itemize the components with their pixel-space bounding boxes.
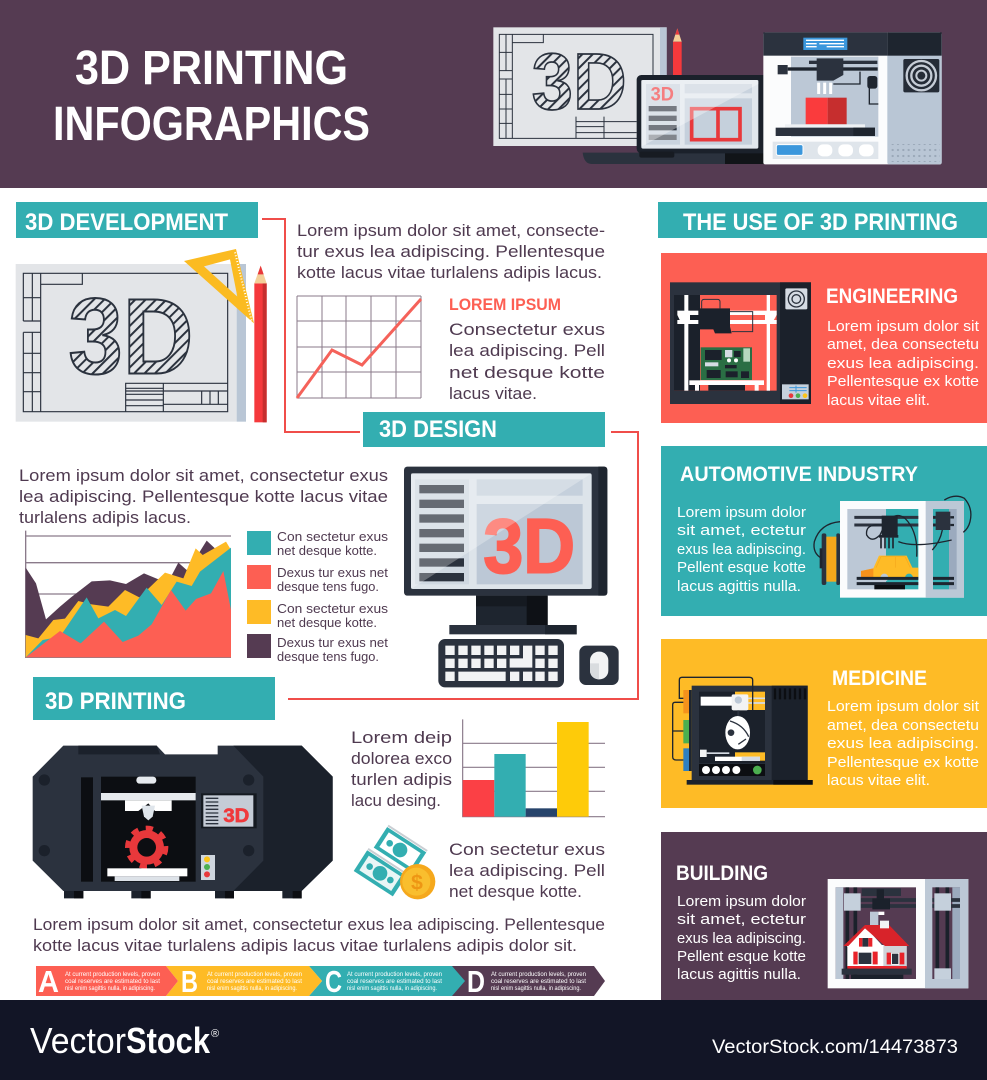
large blueprint illustration [16, 249, 267, 422]
title: INFOGRAPHICS [53, 98, 370, 151]
step B: coal reserves are estimated to last [207, 979, 302, 985]
panel text: Pellentesque ex kotte [827, 755, 979, 771]
text block: development intro: kotte lacus vitae turlalens adipis lacus. [297, 263, 602, 282]
panel title: MEDICINE [832, 667, 927, 690]
panel text: Lorem ipsum dolor sit [827, 699, 979, 715]
icon: large 3D printer [33, 746, 333, 898]
step C: coal reserves are estimated to last [347, 979, 442, 985]
panel title: AUTOMOTIVE INDUSTRY [680, 463, 918, 486]
text block: design intro [19, 466, 388, 527]
heading: 3D printing [33, 677, 275, 720]
text block: chart note: net desque kotte [449, 363, 605, 382]
footer logo: Stock [126, 1020, 211, 1061]
blueprint sheet [493, 27, 667, 146]
panel text: lacus agittis nulla. [677, 967, 801, 983]
icon: house printer [828, 879, 968, 988]
connector: development to design [262, 219, 360, 432]
panel text: Lorem ipsum dolor [677, 894, 806, 910]
text block: bar chart note: turlen adipis [351, 770, 452, 789]
text block: bar chart note: dolorea exco [351, 749, 452, 768]
text block: bar chart note: lacu desing. [351, 791, 441, 810]
panel: engineering [661, 253, 987, 423]
text block: design intro: Lorem ipsum dolor sit amet, consectetur exus [19, 466, 388, 485]
status lights [201, 855, 215, 880]
step A: coal reserves are estimated to last [65, 979, 160, 985]
icon: pencil [254, 266, 267, 422]
pencil [673, 28, 682, 77]
step D: coal reserves are estimated to last [491, 979, 586, 985]
step A [36, 964, 178, 999]
connector: design to printing [288, 432, 638, 699]
panel text: sit amet, ectetur [677, 523, 806, 539]
circuit board [701, 347, 752, 380]
panel text: Pellentesque ex kotte [827, 374, 979, 390]
step arrows A to D [36, 964, 605, 999]
step B [166, 964, 322, 999]
bar chart [463, 719, 605, 817]
skull model [725, 716, 750, 749]
panel text: Pellent esque kotte [677, 560, 806, 576]
legend: Dexus tur exus net [277, 635, 388, 650]
icon: money [354, 825, 435, 899]
step A: A [38, 964, 59, 999]
text block: printing body: Lorem ipsum dolor sit amet, consectetur exus lea adipiscing. Pellentesque [33, 915, 605, 934]
panel text: exus lea adipiscing. [827, 356, 979, 372]
panel text: exus lea adipiscing. [677, 931, 806, 947]
legend [247, 529, 389, 664]
text block: money note: Con sectetur exus [449, 840, 605, 859]
step C: nisl enim sagittis nulla, in adipiscing. [347, 986, 437, 992]
text block: chart note: lacus vitae. [449, 384, 537, 403]
step D: At current production levels, proven [491, 972, 586, 978]
step D [452, 964, 605, 999]
line chart [297, 296, 421, 398]
panel text [677, 894, 806, 983]
blueprint sheet: 3D [532, 37, 627, 126]
footer logo [30, 1020, 219, 1061]
text block: design intro: lea adipiscing. Pellentesque kotte lacus vitae [19, 487, 388, 506]
panel: medicine [661, 639, 987, 808]
panel text: sit amet, ectetur [677, 912, 806, 928]
panel text: Pellent esque kotte [677, 949, 806, 965]
text block: development intro: tur exus lea adipiscing. Pellentesque [297, 242, 605, 261]
heading: the use of 3D printing: THE USE OF 3D PRINTING [683, 209, 958, 236]
icon: large 3D printer: 3D [223, 806, 249, 827]
legend: net desque kotte. [277, 615, 377, 630]
panel text: lacus agittis nulla. [677, 579, 801, 595]
panel title: BUILDING [676, 862, 768, 885]
laptop [583, 75, 768, 164]
text block: bar chart note: Lorem deip [351, 728, 452, 747]
footer band [0, 1000, 987, 1080]
toy car [861, 556, 918, 582]
panel text: lacus vitae elit. [827, 773, 930, 789]
legend: desque tens fugo. [277, 579, 379, 594]
desktop 3D printer [763, 32, 942, 164]
step C: C [325, 964, 342, 999]
footer image id: VectorStock.com/14473873 [712, 1037, 958, 1058]
step A: nisl enim sagittis nulla, in adipiscing. [65, 986, 155, 992]
footer logo: Vector [30, 1020, 126, 1061]
icon: keyboard [438, 639, 564, 687]
step D: D [467, 964, 485, 999]
step B: At current production levels, proven [207, 972, 302, 978]
icon: set square [184, 249, 254, 323]
icon: desktop computer: 3D [483, 503, 575, 589]
title: 3D PRINTING [75, 42, 348, 95]
panel title: ENGINEERING [826, 285, 958, 308]
icon: red gear [127, 828, 166, 867]
panel text: lacus vitae elit. [827, 393, 930, 409]
legend: Con sectetur exus [277, 529, 389, 544]
house [843, 921, 909, 969]
icon: car printer [814, 496, 971, 598]
step D: nisl enim sagittis nulla, in adipiscing. [491, 986, 581, 992]
text block: development intro: Lorem ipsum dolor sit amet, consecte- [297, 221, 605, 240]
heading: the use of 3D printing [658, 202, 987, 238]
icon: desktop computer [404, 467, 619, 687]
text block: bar chart note [351, 728, 452, 810]
text block: money note: net desque kotte. [449, 882, 582, 901]
legend: desque tens fugo. [277, 649, 379, 664]
icon: money: $ [411, 870, 423, 894]
panel: building [661, 832, 987, 1000]
text block: development intro [297, 221, 605, 282]
step C: At current production levels, proven [347, 972, 442, 978]
header band [0, 0, 987, 188]
heading: 3D printing: 3D PRINTING [45, 688, 186, 715]
legend: Con sectetur exus [277, 601, 389, 616]
text block: chart note [449, 320, 605, 403]
text block: chart note: lea adipiscing. Pell [449, 341, 605, 360]
panel text: exus lea adipiscing. [827, 736, 979, 752]
text block: chart note: Consectetur exus [449, 320, 605, 339]
panel text: Lorem ipsum dolor [677, 505, 806, 521]
text block: money note: lea adipiscing. Pell [449, 861, 605, 880]
heading: 3D design [363, 412, 605, 447]
panel text [827, 699, 979, 789]
legend: net desque kotte. [277, 543, 377, 558]
step B: B [181, 964, 198, 999]
panel text: Lorem ipsum dolor sit [827, 319, 979, 335]
text block: printing body [33, 915, 605, 955]
text block: printing body: kotte lacus vitae turlalens adipis lacus vitae turlalens adipis dolor sit. [33, 936, 577, 955]
step A: At current production levels, proven [65, 972, 160, 978]
subheading: lorem ipsum: LOREM IPSUM [449, 295, 561, 314]
heading: 3D development [16, 202, 258, 238]
laptop: 3D [651, 85, 674, 106]
large blueprint illustration: 3D [68, 276, 193, 396]
title [53, 42, 370, 151]
icon: skull printer [673, 677, 813, 785]
text block: money note [449, 840, 605, 901]
panel text [677, 505, 806, 595]
icon: circuit board printer [670, 282, 811, 404]
heading: 3D design: 3D DESIGN [379, 416, 497, 443]
panel text: amet, dea consectetu [827, 718, 979, 734]
footer logo: ® [211, 1028, 219, 1040]
panel text [827, 319, 979, 409]
step B: nisl enim sagittis nulla, in adipiscing. [207, 986, 297, 992]
panel: automotive industry [661, 446, 987, 616]
heading: 3D development: 3D DEVELOPMENT [25, 209, 228, 236]
legend: Dexus tur exus net [277, 565, 388, 580]
step C [309, 964, 465, 999]
panel text: exus lea adipiscing. [677, 542, 806, 558]
area chart [26, 531, 231, 657]
text block: design intro: turlalens adipis lacus. [19, 508, 191, 527]
icon: mouse [579, 646, 619, 685]
illustration: blueprint, laptop and printer [493, 27, 942, 164]
panel text: amet, dea consectetu [827, 337, 979, 353]
